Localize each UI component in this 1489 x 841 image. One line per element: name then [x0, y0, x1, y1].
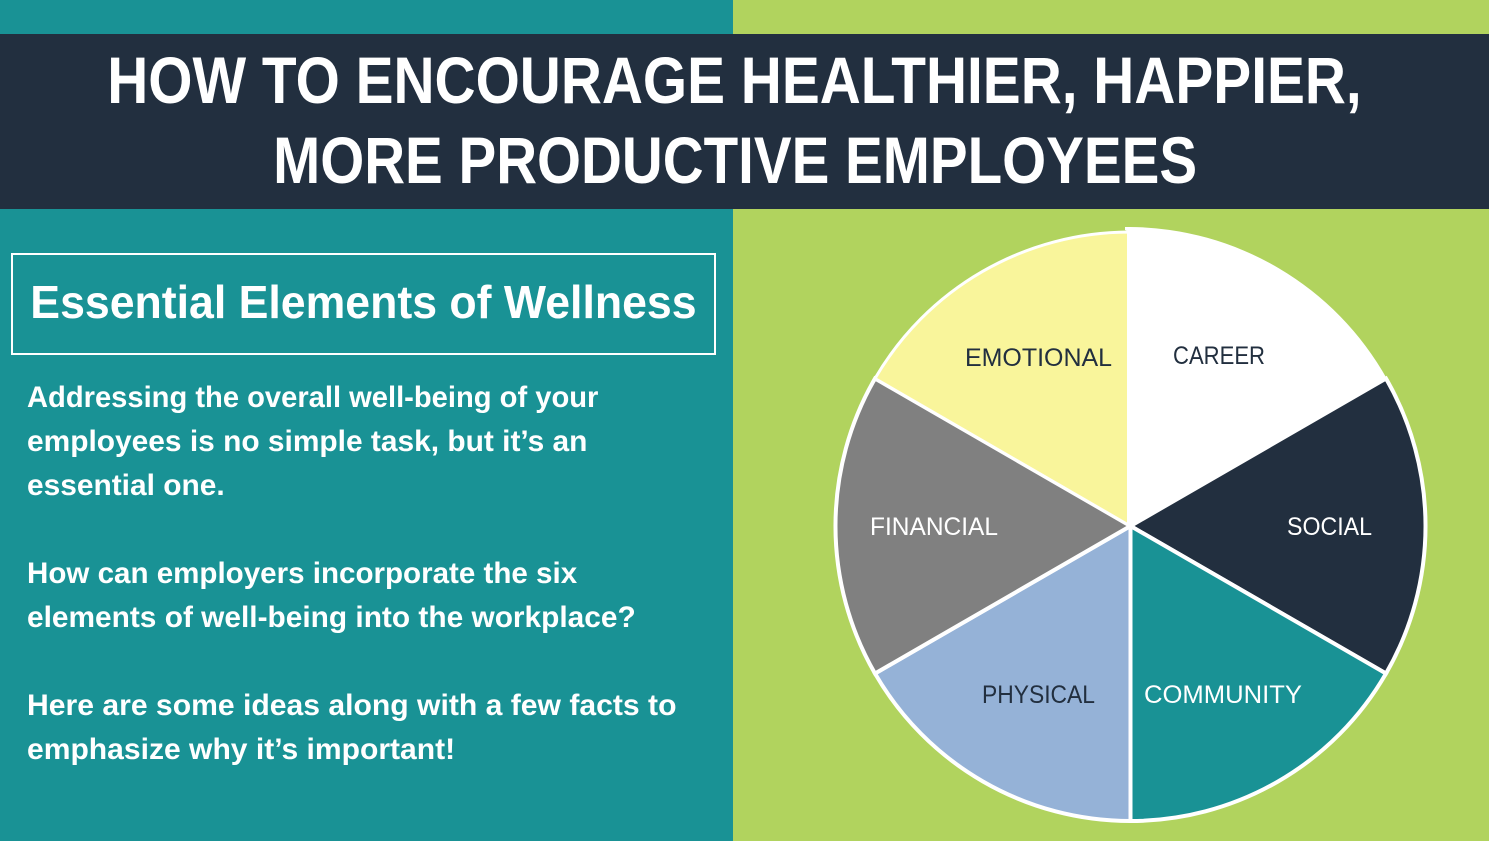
slice: community — [1130, 526, 1386, 821]
text block: intro paragraph: essential one. — [27, 469, 225, 502]
background: green right panel — [733, 0, 1489, 841]
slice: emotional — [875, 232, 1128, 525]
pie chart: six elements of wellness — [834, 227, 1428, 823]
slice: community: COMMUNITY — [1144, 681, 1302, 709]
slice: financial — [835, 378, 1130, 674]
title banner — [0, 34, 1489, 209]
heading box: Essential Elements of Wellness — [11, 253, 716, 355]
text block: question paragraph: elements of well-being into the workplace? — [27, 601, 636, 634]
title line 2: MORE PRODUCTIVE EMPLOYEES — [274, 123, 1197, 197]
slice: career — [1125, 227, 1387, 525]
slice: social — [1130, 378, 1426, 674]
slice: financial: FINANCIAL — [870, 513, 998, 541]
text block: intro paragraph — [27, 381, 598, 502]
slice: career: CAREER — [1173, 342, 1265, 370]
slice: physical — [875, 526, 1130, 821]
slice: emotional: EMOTIONAL — [965, 344, 1112, 372]
background: teal left panel — [0, 0, 733, 841]
text block: intro paragraph: Addressing the overall well-being of your — [27, 381, 598, 414]
text block: closing paragraph: Here are some ideas along with a few facts to — [27, 689, 676, 722]
text block: question paragraph — [27, 557, 636, 634]
title line 1: HOW TO ENCOURAGE HEALTHIER, HAPPIER, — [107, 43, 1362, 117]
text block: closing paragraph: emphasize why it’s important! — [27, 733, 455, 766]
text block: closing paragraph — [27, 689, 676, 766]
text block: intro paragraph: employees is no simple task, but it’s an — [27, 425, 587, 458]
heading box: Essential Elements of Wellness: Essential Elements of Wellness — [30, 276, 697, 328]
slice: physical: PHYSICAL — [982, 681, 1095, 709]
text block: question paragraph: How can employers incorporate the six — [27, 557, 577, 590]
slice: social: SOCIAL — [1287, 513, 1372, 541]
